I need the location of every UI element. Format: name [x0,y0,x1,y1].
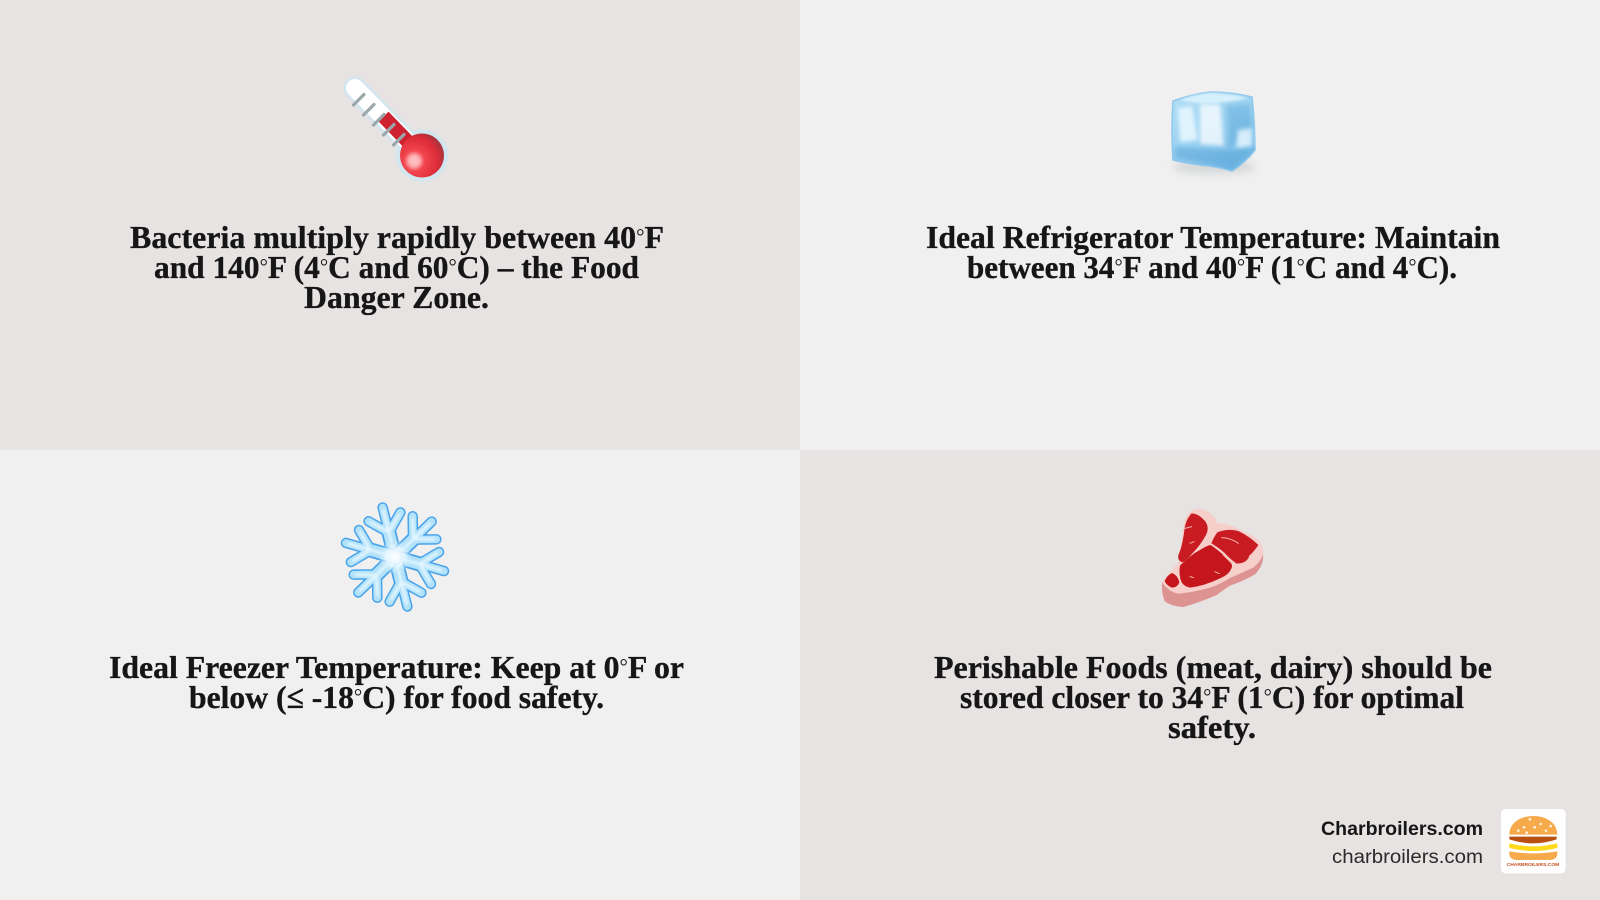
icon: thermometer [354,88,448,182]
text: perishable statement [934,649,1492,745]
text: bacteria statement: Danger Zone. [304,279,489,315]
text: refrigerator statement: ° [1114,254,1123,278]
icon: ice cube [1172,92,1256,174]
panel: freezer temperature [0,450,800,900]
text: bacteria statement: C and 60 [328,249,448,285]
text: refrigerator statement: F (1 [1245,249,1297,285]
text: perishable statement: C) for optimal [1272,679,1464,715]
text: refrigerator statement: C). [1416,249,1457,285]
text: bacteria statement: Bacteria multiply rapidly between 40 [130,219,637,255]
text: freezer statement: Ideal Freezer Temperature: Keep at 0 [109,649,624,685]
text: refrigerator statement: Ideal Refrigerator Temperature: Maintain [926,219,1500,255]
text: bacteria statement: ° [636,224,644,248]
text: bacteria statement: C) – the Food [457,249,639,285]
panel: refrigerator temperature [800,0,1600,450]
text: perishable statement: F (1 [1211,679,1264,715]
text: refrigerator statement: ° [1408,254,1416,278]
text: perishable statement: Perishable Foods (meat, dairy) should be [934,649,1492,685]
panel: perishable foods [800,450,1600,900]
text: perishable statement: ° [1203,684,1211,708]
panel: bacteria danger zone [0,0,800,450]
text: freezer statement: ° [620,654,628,678]
thermometer ticks [354,94,404,145]
text: refrigerator statement: F and 40 [1123,249,1237,285]
text: refrigerator statement: ° [1237,254,1245,278]
text: refrigerator statement: ° [1297,254,1305,278]
text: freezer statement: F or [628,649,684,685]
brand name: Charbroilers.com [1321,819,1483,840]
steak marbling [1185,527,1238,578]
text: freezer statement [109,649,684,715]
text: bacteria statement [130,219,664,315]
text: perishable statement: stored closer to 34 [960,679,1207,715]
text: bacteria statement: F [644,219,664,255]
text: freezer statement: ° [354,684,362,708]
text: perishable statement: ° [1264,684,1272,708]
icon: steak [1162,509,1263,607]
text: freezer statement: below (≤ -18 [189,679,356,715]
text: bacteria statement: ° [320,254,328,278]
text: refrigerator statement: between 34 [967,249,1119,285]
logo: burger [1501,809,1566,873]
text: perishable statement: safety. [1168,709,1256,745]
icon: snowflake [341,504,449,610]
text: refrigerator statement [926,219,1500,285]
text: bacteria statement: ° [448,254,457,278]
text: freezer statement: C) for food safety. [362,679,604,715]
text: refrigerator statement: C and 4 [1305,249,1408,285]
logo: burger: CHARBROILERS.COM [1507,862,1559,867]
text: bacteria statement: ° [260,254,268,278]
text: bacteria statement: F (4 [268,249,320,285]
brand url: charbroilers.com [1332,847,1483,868]
text: bacteria statement: and 140 [154,249,262,285]
